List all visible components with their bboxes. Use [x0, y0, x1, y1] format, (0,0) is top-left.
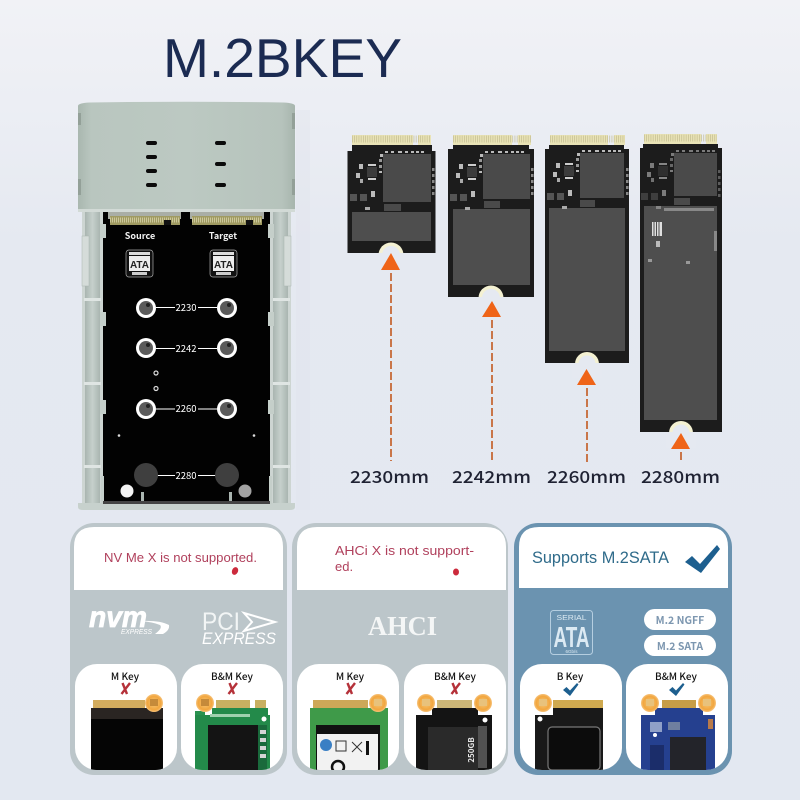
icon: check mark [685, 545, 720, 573]
header [519, 527, 728, 588]
panel: AHCI not supported [292, 523, 508, 775]
serial ata logo: SERIAL [556, 613, 586, 622]
panel: M.2 SATA supported [514, 523, 732, 775]
card: B&M Key [181, 664, 283, 770]
label 2260mm: 2260mm [547, 463, 626, 488]
pci express logo [202, 608, 277, 648]
ssd 2260 [545, 135, 629, 378]
black circuit board [103, 212, 270, 502]
card: M Key [297, 664, 399, 773]
source label: Source [125, 229, 155, 242]
header [74, 527, 283, 590]
source connector [108, 212, 181, 225]
AHCI logo: AHCI [368, 611, 437, 641]
serial ata logo: ATA [554, 622, 590, 654]
card: B Key: B Key [557, 668, 584, 683]
label 2242mm: 2242mm [452, 463, 531, 488]
arrow 2260 [577, 369, 596, 462]
serial ata logo: 6Gb/s [565, 649, 578, 654]
pill: M.2 NGFF [644, 609, 716, 630]
panel: NVMe not supported [70, 523, 287, 775]
card: B&M Key: B&M Key [655, 668, 698, 683]
card: B&M Key: B&M Key [434, 668, 477, 683]
top cap [78, 102, 295, 212]
pill: M.2 NGFF: M.2 NGFF [656, 613, 704, 628]
target label: Target [209, 229, 237, 242]
pill: M.2 SATA [644, 635, 716, 656]
card: B&M Key [404, 664, 506, 770]
serial ata logo [550, 610, 592, 654]
nvm express logo: EXPRESS [121, 629, 152, 636]
arrow 2280 [671, 433, 690, 460]
notice text: NV Me X is not supported. [104, 550, 257, 565]
pci express logo: EXPRESS [202, 629, 277, 648]
ssd 2230 [348, 135, 436, 269]
nvm express logo: nvm [89, 601, 147, 634]
mounting holes with length marks [118, 298, 255, 498]
capacity print: 250GB [466, 737, 477, 763]
label 2280mm: 2280mm [641, 463, 720, 488]
notice text continued: ed. [335, 559, 353, 574]
card: B&M Key: B&M Key [211, 668, 254, 683]
card: B Key [520, 664, 622, 770]
support text: Supports M.2SATA [532, 549, 669, 567]
arrow 2230 [381, 253, 400, 461]
mounting holes with length marks: 2242 [175, 341, 197, 355]
pci express logo: PCI [202, 608, 240, 636]
arrow 2242 [482, 301, 501, 461]
header [297, 527, 506, 590]
enclosure tray [78, 212, 295, 510]
ssd 2280 [640, 134, 722, 448]
mounting holes with length marks: 2280 [175, 468, 197, 482]
card: M Key [75, 664, 177, 770]
vent slots [146, 141, 226, 187]
enclosure with black board [78, 102, 295, 510]
label 2230mm: 2230mm [350, 463, 429, 488]
card: B&M Key [626, 664, 728, 770]
mounting holes with length marks: 2260 [175, 401, 197, 415]
ssd 2242 [448, 135, 534, 313]
target connector [190, 212, 264, 225]
card: M Key: M Key [111, 668, 140, 683]
card: M Key: M Key [336, 668, 365, 683]
pill: M.2 SATA: M.2 SATA [657, 639, 703, 654]
mounting holes with length marks: 2230 [175, 300, 197, 314]
notice text: AHCi X is not support- [335, 543, 474, 558]
title: M.2BKEY [163, 27, 402, 89]
